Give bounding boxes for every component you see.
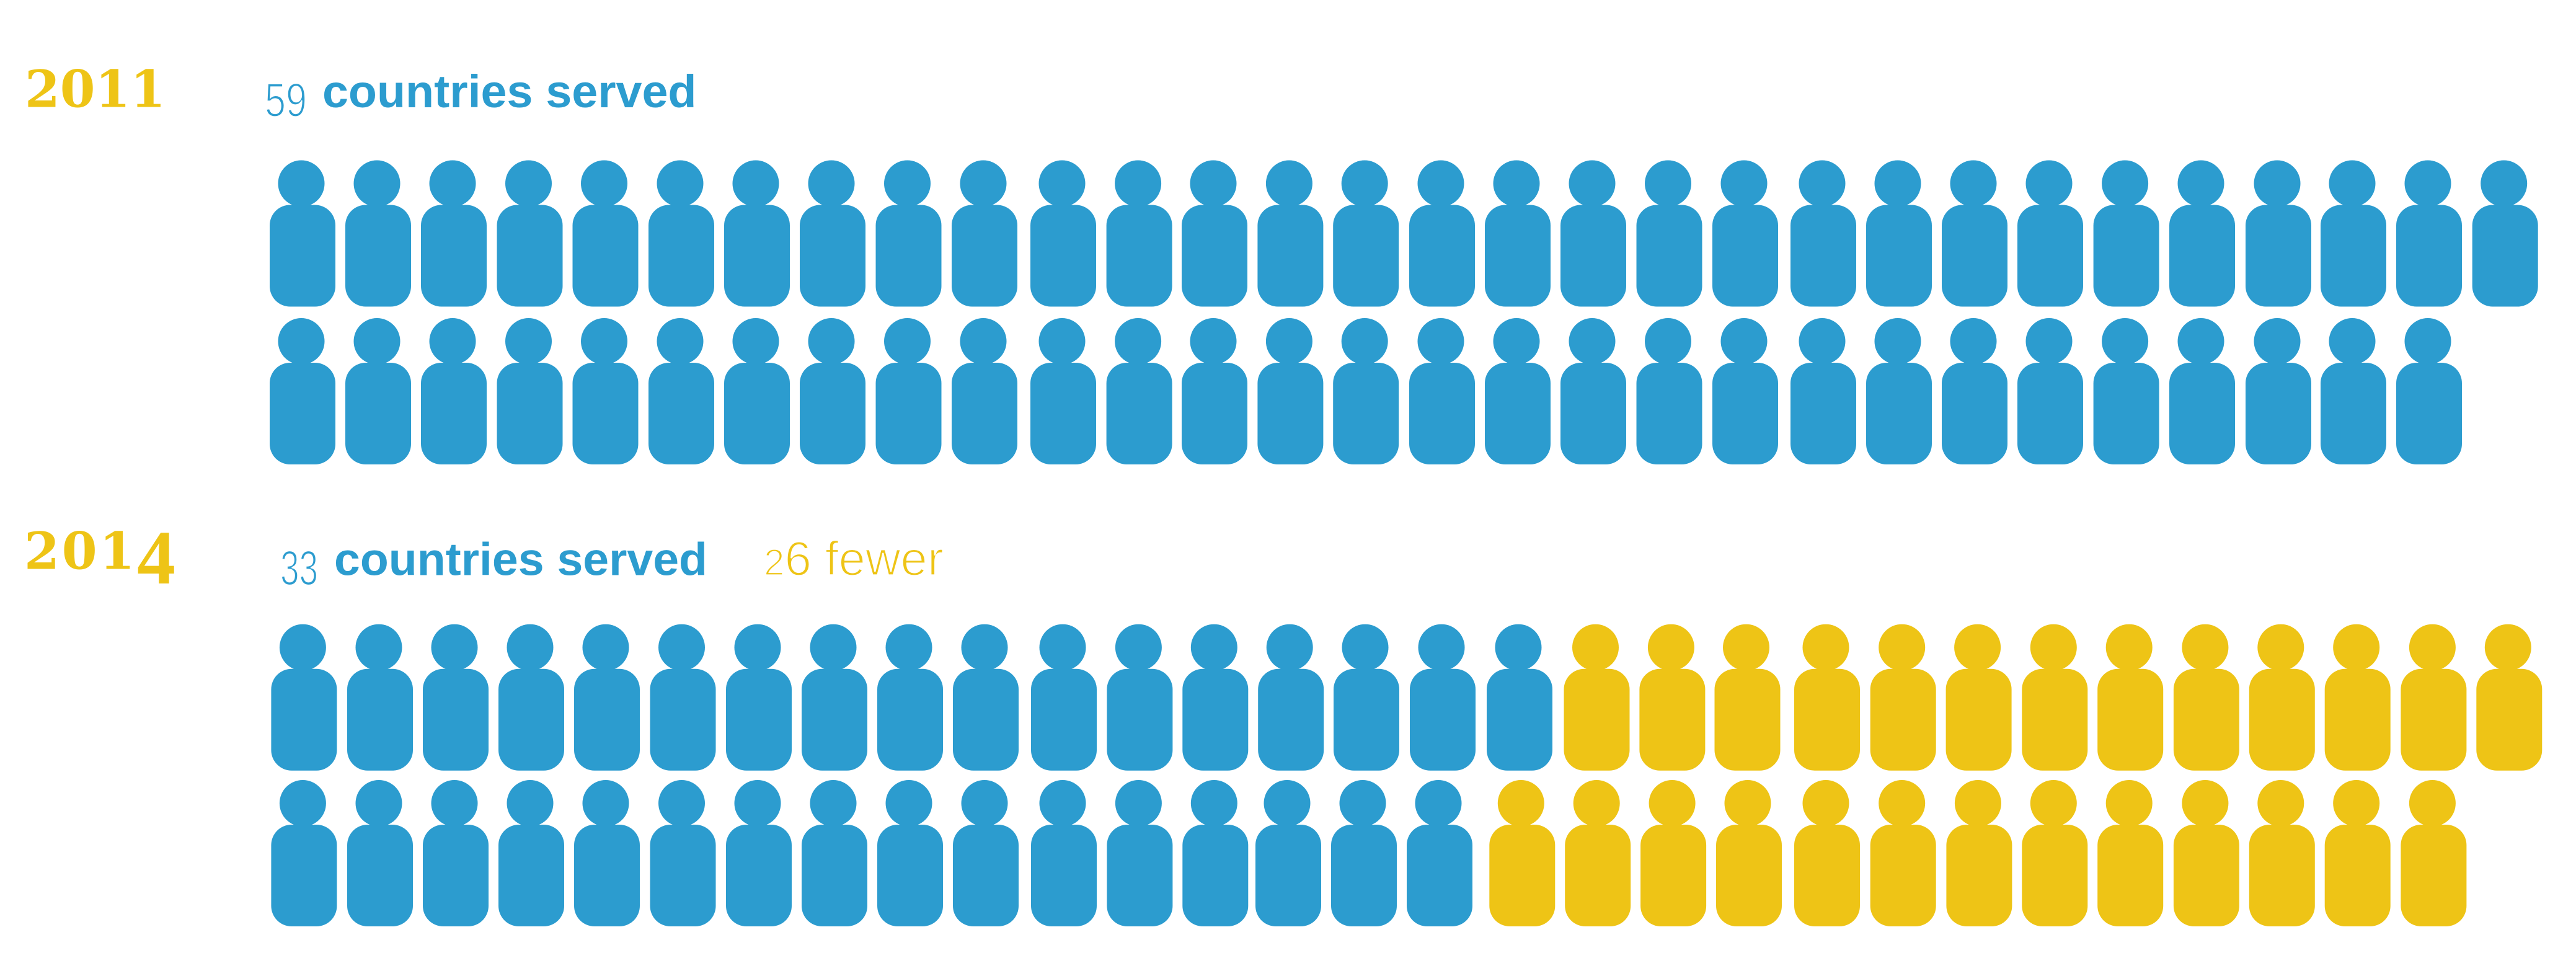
- pictogram: 2011 second row of 29 people: [270, 318, 2462, 464]
- heading: year 2014: 4: [137, 515, 175, 600]
- label: countries served 2011: countries served: [322, 66, 697, 117]
- pictogram: 2014 second row, 16 blue people: [271, 780, 1472, 926]
- heading: 33 countries served: [280, 533, 707, 595]
- pictogram: 2014 second row, 13 yellow people: [1489, 780, 2466, 926]
- heading: year 2014: 201: [24, 522, 135, 582]
- pictogram: 2014 first row, 17 blue people: [271, 624, 1552, 771]
- pictogram: 2011 first row of 30 people: [270, 160, 2538, 306]
- label: countries served 2014: countries served: [334, 533, 707, 585]
- heading: year 2011: 2011: [25, 60, 166, 119]
- pictogram: 2014 first row, 13 yellow people: [1564, 624, 2542, 771]
- number: 59: 59: [265, 74, 307, 127]
- heading: 59 countries served: [265, 66, 697, 127]
- number: 33: 33: [280, 540, 318, 595]
- label: 26 fewer: 26 fewer: [764, 531, 944, 585]
